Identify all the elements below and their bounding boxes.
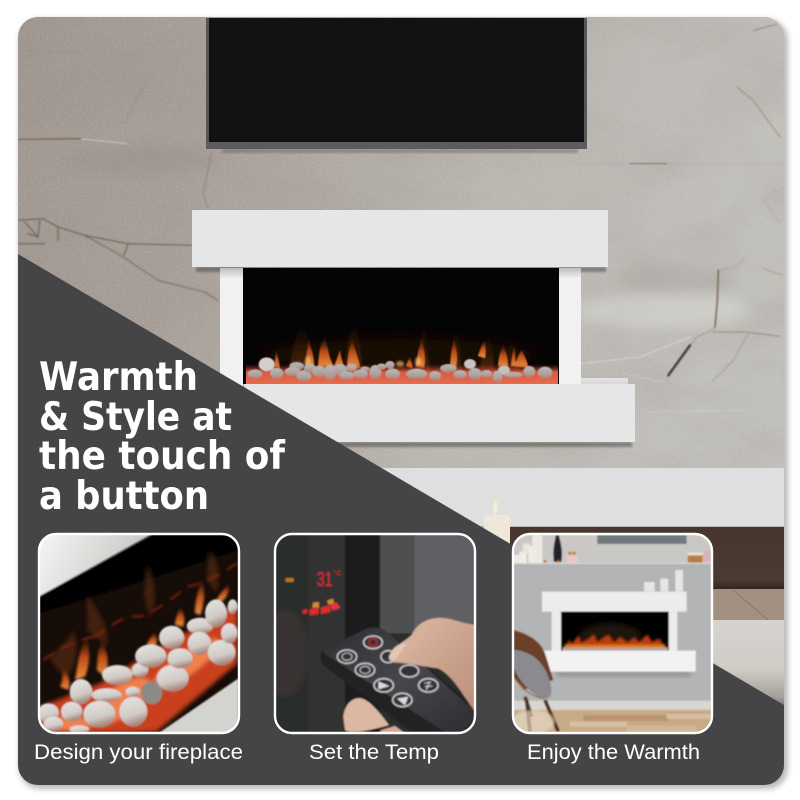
concrete wall — [18, 17, 784, 469]
fingertip highlight — [389, 644, 407, 662]
heat gauge — [286, 578, 340, 615]
dark wood unit — [500, 527, 784, 589]
skirting — [510, 701, 713, 710]
icon: candle — [484, 499, 510, 547]
mini fireplace — [542, 592, 696, 676]
photo: stones and flames close-up — [38, 533, 240, 735]
flames — [266, 328, 534, 370]
caption: Set the Temp — [309, 740, 439, 764]
dim flames — [50, 552, 219, 680]
temperature display: °C — [334, 569, 341, 577]
chair — [512, 630, 558, 733]
caption: Design your fireplace — [34, 740, 243, 764]
left pillar — [220, 268, 243, 388]
stones — [248, 357, 552, 383]
ember bed — [246, 364, 558, 384]
title — [39, 355, 286, 519]
lower finger — [378, 726, 405, 733]
caption: Enjoy the Warmth — [527, 740, 700, 764]
right pillar — [558, 268, 581, 384]
fireplace shadows — [196, 267, 632, 447]
title: & Style at — [39, 395, 232, 440]
shelf ornaments — [513, 535, 711, 563]
panel: design your fireplace — [34, 533, 243, 764]
thumb — [343, 698, 389, 732]
back wall log embers — [43, 563, 237, 660]
floor boards — [510, 710, 713, 733]
top mantel — [192, 210, 608, 267]
skirting panel — [382, 468, 784, 526]
photo: living room — [510, 533, 713, 733]
panel: enjoy the warmth — [510, 533, 713, 764]
white stones — [38, 599, 238, 733]
photo frame — [275, 534, 475, 733]
panel: wall-mounted fireplace — [192, 210, 635, 447]
right wall cracks — [580, 24, 783, 412]
TV — [206, 18, 587, 153]
panel: set the temp — [262, 533, 477, 764]
white base — [158, 678, 238, 733]
title: Warmth — [39, 355, 198, 400]
glowing ember bed — [40, 603, 237, 733]
firebox — [243, 268, 559, 384]
remote buttons — [337, 636, 438, 707]
hand — [389, 618, 476, 712]
photo: remote control — [262, 533, 477, 733]
title: a button — [39, 474, 209, 519]
temperature display: 31 — [317, 568, 333, 591]
left wall cracks — [18, 137, 219, 302]
rug — [713, 620, 784, 705]
button glyphs — [342, 638, 432, 705]
photo frame — [39, 534, 239, 733]
photo frame — [513, 534, 712, 733]
wall picture — [597, 535, 687, 544]
ember glow — [57, 636, 220, 732]
candles on mantel — [644, 570, 683, 591]
bottom mantel — [244, 378, 635, 442]
dark interior band — [40, 535, 240, 613]
title: the touch of — [39, 434, 286, 479]
white surround wedge — [38, 533, 153, 597]
panel: dark overlay — [18, 254, 784, 785]
wooden floor — [713, 588, 784, 620]
bright flames — [60, 578, 229, 690]
remote body — [320, 652, 470, 732]
